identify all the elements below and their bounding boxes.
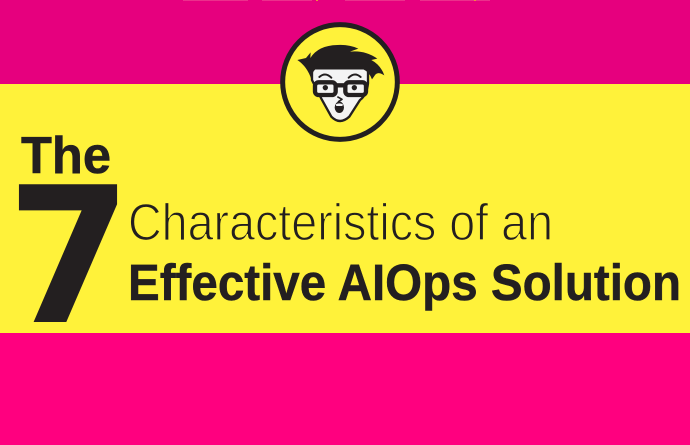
icon: cartoon nerd face badge bbox=[283, 25, 397, 139]
eye pupils bbox=[323, 85, 328, 90]
face bbox=[312, 68, 368, 121]
cropped text remnants along top edge bbox=[183, 0, 490, 1]
nose bbox=[337, 97, 342, 102]
bottom pink band bbox=[0, 333, 690, 445]
heading: numeral 7: 7 bbox=[7, 147, 131, 367]
hair bbox=[297, 45, 384, 79]
top magenta band bbox=[0, 0, 690, 84]
badge circle bbox=[283, 25, 397, 139]
heading: The: The bbox=[21, 127, 111, 185]
eyebrows bbox=[319, 74, 361, 78]
heading: Characteristics of an: Characteristics of an bbox=[128, 194, 553, 252]
glasses bbox=[315, 82, 366, 95]
mouth bbox=[335, 102, 344, 113]
yellow title band bbox=[0, 84, 690, 333]
